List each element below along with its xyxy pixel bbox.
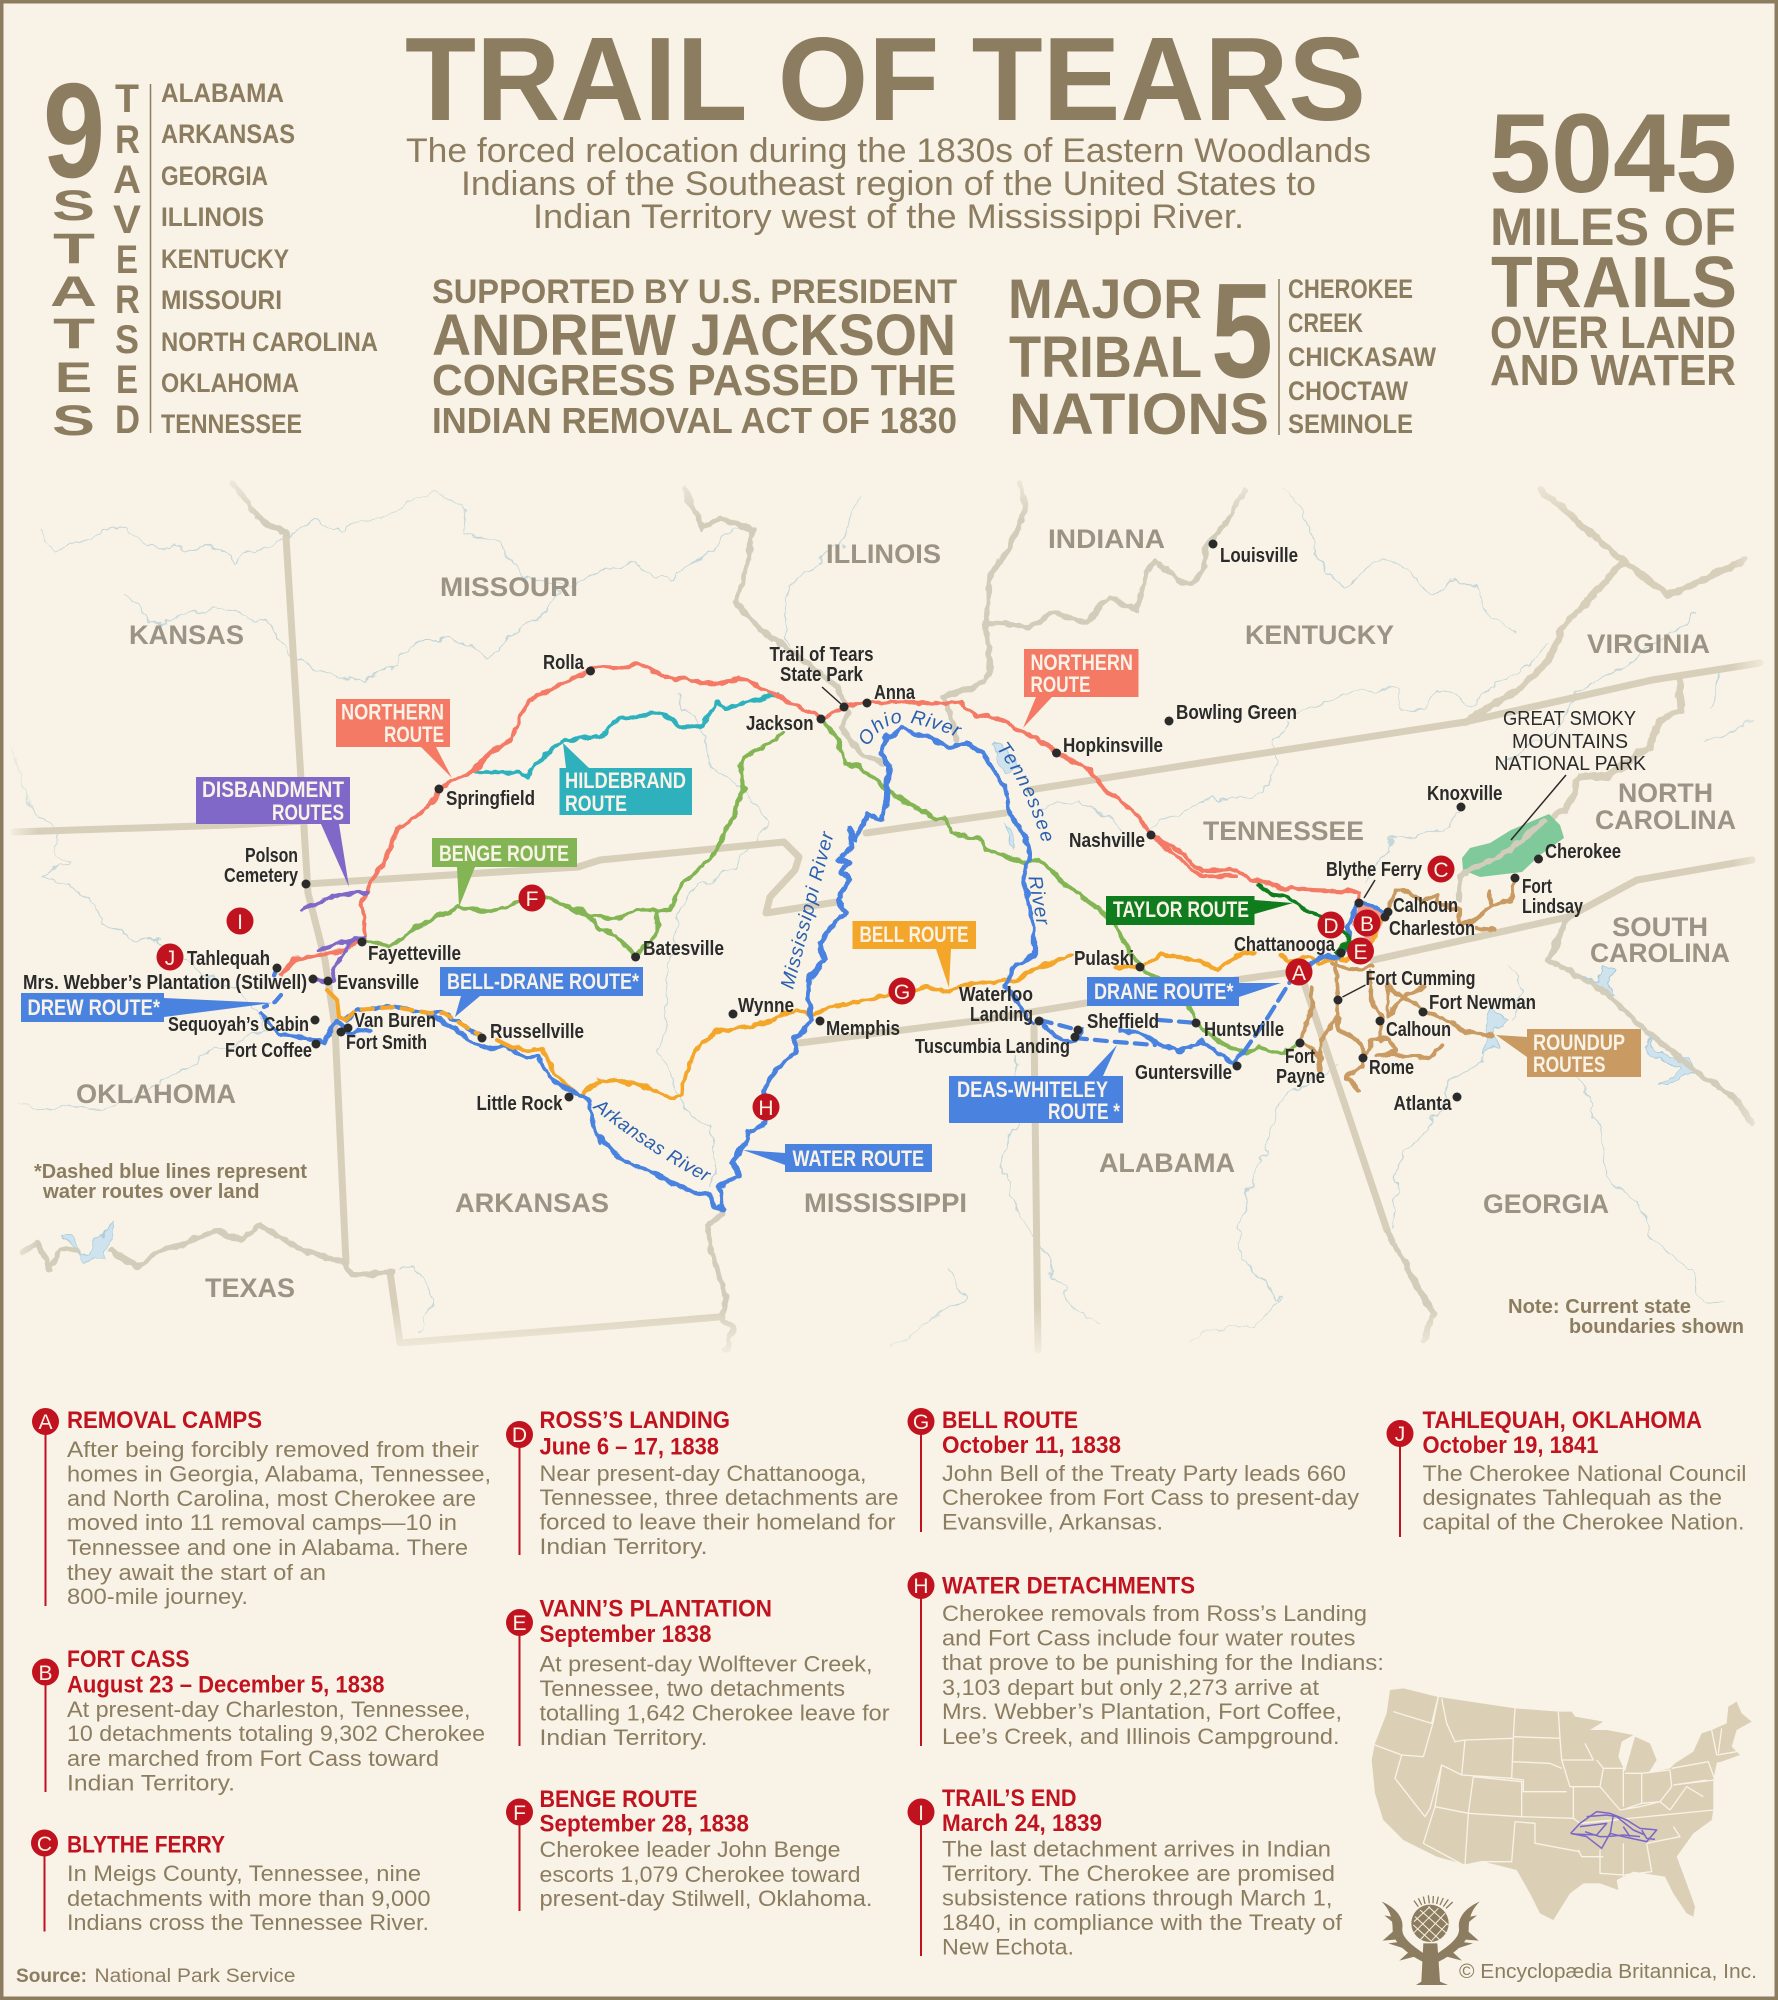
subtitle text block [406,132,1371,236]
panel: timeline entry E: VANN’S PLANTATION [540,1596,772,1622]
map marker J: J [165,947,175,970]
panel: timeline entry D: Near present-day Chattanooga, [540,1461,866,1486]
wavy state boundaries [23,483,1752,1350]
panel: Andrew Jackson statement: INDIAN REMOVAL ACT OF 1830 [432,400,957,441]
map marker H [752,1094,780,1120]
city labels: State Park [780,664,864,686]
map marker G: G [894,981,910,1004]
state labels: SOUTH [1612,912,1708,942]
panel: timeline entry B: Indian Territory. [67,1770,235,1796]
note: dashed blue lines [34,1161,307,1203]
callout: Drew route [21,993,272,1022]
callout: Roundup routes: ROUTES [1533,1052,1606,1077]
panel: timeline entry D: Indian Territory. [540,1534,708,1559]
panel: timeline entry E: Indian Territory. [540,1725,708,1750]
list of states: ARKANSAS [161,119,295,149]
list of nations: CHICKASAW [1288,342,1436,372]
callout: Hildebrand route: HILDEBRAND [565,768,686,793]
panel: 5045 miles of trails: 5045 [1489,91,1737,216]
panel: Andrew Jackson statement: SUPPORTED BY U.S. PRESIDENT [432,273,957,311]
panel: Andrew Jackson statement [432,273,957,441]
city labels: Calhoun [1393,895,1458,917]
panel: timeline entry F: BENGE ROUTE [540,1786,698,1813]
city labels: Sheffield [1087,1011,1159,1033]
Fort Cass shaded area [1352,903,1388,945]
route: Taylor [1258,885,1350,953]
vertical word TRAVERSED: E [116,238,138,282]
river labels: Tennessee [998,742,1052,841]
map marker A [1286,958,1312,986]
city labels: Fort Newman [1429,992,1536,1014]
panel: timeline entry I: New Echota. [942,1934,1074,1960]
vertical word TRAVERSED: T [115,77,139,121]
river labels: Ohio River [860,710,962,744]
icon: Britannica thistle [1382,1895,1480,1985]
small trail routes on locator map [1571,1812,1657,1848]
state labels: GEORGIA [1483,1189,1609,1219]
map marker H: H [758,1097,774,1120]
list of states: MISSOURI [161,285,282,315]
panel: timeline entry A: After being forcibly removed from their [67,1437,479,1462]
panel: timeline entry G: BELL ROUTE [942,1407,1078,1434]
state labels: TEXAS [205,1273,295,1303]
rivers and lakes [11,487,1752,1350]
city labels: Pulaski [1074,948,1134,970]
panel: timeline entry H: Cherokee removals from Ross’s Landing [942,1601,1367,1626]
panel: timeline entry E: E [512,1612,527,1635]
panel: timeline entry H: 3,103 depart but only 2,273 arrive at [942,1675,1319,1700]
panel: timeline entry B: are marched from Fort Cass toward [67,1746,439,1771]
list of states: NORTH CAROLINA [161,327,378,357]
state labels: MISSOURI [440,572,578,602]
city labels: Batesville [643,938,724,960]
callout: Deas-Whiteley route: DEAS-WHITELEY [957,1077,1108,1102]
panel: timeline entry G: October 11, 1838 [942,1432,1121,1459]
callout: Northern route east: ROUTE [1030,672,1090,697]
vertical word STATES: S [52,182,95,230]
city labels [23,545,1621,1115]
panel: timeline entry C: Indians cross the Tennessee River. [67,1910,429,1935]
city labels: Russellville [490,1021,584,1043]
panel: Andrew Jackson statement: CONGRESS PASSED THE [432,356,956,405]
city labels: Rome [1369,1057,1414,1079]
panel: timeline entry E: September 1838 [540,1621,712,1648]
city labels: Memphis [826,1018,900,1040]
map marker C [1428,856,1454,882]
panel: timeline entry J [1386,1407,1746,1537]
panel: timeline entry H: and Fort Cass include four water routes [942,1626,1356,1650]
panel: timeline entry C: C [37,1833,52,1856]
city labels: Louisville [1220,545,1298,567]
note: current state boundaries: boundaries shown [1569,1316,1744,1338]
panel: timeline entry D: D [512,1424,527,1447]
state labels: INDIANA [1048,524,1165,554]
panel: 5 major tribal nations [1008,255,1436,447]
list of nations: CREEK [1288,308,1363,338]
callout: Northern route west: ROUTE [384,722,444,747]
vertical word TRAVERSED: R [115,278,140,322]
list of nations: CHOCTAW [1288,376,1408,406]
panel: timeline entry C: In Meigs County, Tennessee, nine [67,1861,421,1886]
panel: timeline entry F: F [513,1802,526,1825]
map marker B [1354,910,1380,936]
map marker G [888,978,916,1004]
state labels: NORTH [1618,778,1713,808]
river labels: River [1023,874,1054,928]
panel: timeline entry F: present-day Stilwell, Oklahoma. [540,1886,872,1911]
vertical word STATES: A [50,268,97,316]
Great Smoky Mountains National Park area [1462,814,1564,877]
city labels: Springfield [446,788,535,810]
note: dashed blue lines: water routes over land [42,1181,260,1203]
city labels: Tuscumbia Landing [915,1036,1070,1058]
callout: Bell-Drane route: BELL-DRANE ROUTE* [447,969,639,994]
panel: timeline entry J: October 19, 1841 [1422,1432,1598,1459]
panel: 9 states traversed [43,55,378,445]
note: dashed blue lines: *Dashed blue lines represent [34,1161,307,1183]
map marker B: B [1360,913,1374,936]
panel: timeline entry B: B [38,1662,53,1685]
list of nations: CHEROKEE [1288,274,1413,304]
state labels: ILLINOIS [826,539,941,569]
panel: timeline entry I: March 24, 1839 [942,1810,1102,1837]
panel: timeline entry G: Cherokee from Fort Cass to present-day [942,1485,1359,1510]
city labels: Guntersville [1135,1062,1232,1084]
vertical word STATES: T [53,310,95,358]
panel: timeline entry J: capital of the Cherokee Nation. [1422,1510,1744,1534]
city labels: Charleston [1389,918,1475,940]
callout: Drane route: DRANE ROUTE* [1094,979,1234,1004]
panel: timeline entry F: escorts 1,079 Cherokee toward [540,1862,860,1887]
list of states: KENTUCKY [161,244,289,274]
callout: Roundup routes: ROUNDUP [1533,1030,1625,1055]
panel: timeline entry E: totalling 1,642 Cherokee leave for [540,1700,890,1726]
panel: route map [10,480,1764,1353]
callout: Disbandment routes [196,777,350,887]
river labels: Arkansas River [592,1102,712,1180]
river labels [592,710,1054,1180]
panel: timeline entry G: Evansville, Arkansas. [942,1510,1163,1534]
leader lines [822,687,1566,997]
subtitle text block: Indians of the Southeast region of the United States to [461,165,1316,203]
panel: timeline entry A: they await the start of an [67,1560,326,1585]
callout: Northern route east: NORTHERN [1030,650,1133,675]
panel: timeline entry A: homes in Georgia, Alabama, Tennessee, [67,1462,491,1486]
city labels: Bowling Green [1176,702,1297,724]
map marker F: F [526,888,538,911]
callout: Roundup routes [1496,1029,1641,1077]
heading: major tribal nations: NATIONS [1009,382,1269,447]
state labels: ALABAMA [1099,1148,1235,1178]
vertical word STATES: E [55,354,92,402]
map marker J [156,944,184,970]
map edge fades [4,465,1774,1365]
city labels: Knoxville [1427,783,1502,805]
callout: Hildebrand route: ROUTE [565,791,627,816]
vertical word STATES: T [53,225,95,273]
callout: Disbandment routes: ROUTES [272,800,344,825]
panel: timeline entry H: WATER DETACHMENTS [942,1572,1195,1600]
map marker E [1347,938,1374,964]
city labels: Chattanooga [1234,934,1336,956]
city labels: Wynne [738,995,794,1017]
callout: Bell-Drane route [440,967,643,1017]
panel: timeline entry D: ROSS’S LANDING [540,1407,730,1434]
vertical word TRAVERSED: D [115,398,140,442]
panel: timeline entry A: moved into 11 removal camps—10 in [67,1510,457,1535]
boundary across park [1459,820,1545,900]
city labels: Huntsville [1204,1019,1284,1041]
city labels: Calhoun [1386,1019,1451,1041]
city labels: Hopkinsville [1063,735,1163,757]
list of states: ILLINOIS [161,202,264,232]
panel: 5045 miles of trails: OVER LAND [1490,307,1736,358]
city labels: Jackson [746,713,814,735]
city labels: Blythe Ferry [1326,859,1423,881]
heading: major tribal nations: TRIBAL [1009,325,1202,390]
panel: timeline entry F: September 28, 1838 [540,1810,749,1838]
panel: timeline entry D: forced to leave their homeland for [540,1510,896,1534]
label: Great Smoky Mountains National Park: NATIONAL PARK [1494,752,1646,775]
city labels: Little Rock [476,1093,563,1115]
callout: Northern route west [336,699,452,778]
panel: 5045 miles of trails: MILES OF [1490,198,1736,257]
map marker E: E [1353,941,1368,964]
panel: timeline entry B: 10 detachments totaling 9,302 Cherokee [67,1721,485,1746]
callout: Disbandment routes: DISBANDMENT [202,777,344,802]
panel: timeline entry F: Cherokee leader John Benge [540,1837,840,1862]
city dots [272,540,1543,1102]
source credit [16,1966,296,1987]
label: Great Smoky Mountains National Park [1494,707,1646,775]
panel: timeline entry I: The last detachment arrives in Indian [942,1836,1331,1862]
panel: 5045 miles of trails: AND WATER [1490,346,1736,395]
panel: timeline entry H [908,1572,1384,1749]
callout: Water route: WATER ROUTE [792,1146,924,1171]
city labels: Tahlequah [187,948,270,970]
state labels: CAROLINA [1590,938,1730,968]
panel: timeline entry G: G [913,1411,929,1434]
title: TRAIL OF TEARS [405,13,1366,146]
city labels: Cemetery [224,865,299,887]
city labels: Lindsay [1522,896,1584,918]
label: Great Smoky Mountains National Park: GREAT SMOKY [1503,707,1636,730]
panel: timeline entry E: At present-day Wolftever Creek, [540,1652,872,1676]
city labels: Rolla [543,652,585,674]
map marker F [518,884,546,912]
list of states: GEORGIA [161,161,268,191]
state labels: TENNESSEE [1203,816,1364,846]
panel: timeline entry J: TAHLEQUAH, OKLAHOMA [1422,1407,1702,1434]
city labels: Trail of Tears [770,644,874,666]
Britannica copyright: © Encyclopædia Britannica, Inc. [1459,1961,1757,1983]
panel: timeline entry B: FORT CASS [67,1646,190,1673]
callout: Drew route: DREW ROUTE* [28,995,160,1020]
callout: Benge route [432,838,577,907]
heading: major tribal nations [1008,267,1269,447]
route: Hildebrand [475,696,778,777]
panel: timeline entry A: REMOVAL CAMPS [67,1407,262,1434]
panel: timeline entry C: BLYTHE FERRY [67,1832,225,1858]
callout: Deas-Whiteley route: ROUTE * [1048,1099,1120,1124]
panel: timeline entry A [32,1407,491,1609]
map marker D [1318,912,1344,938]
panel: timeline entry G: John Bell of the Treaty Party leads 660 [942,1461,1346,1486]
route: Roundup [1300,880,1515,1090]
city labels: Fort [1285,1046,1315,1068]
panel: timeline entry I: Territory. The Cherokee are promised [942,1861,1335,1886]
vertical word TRAVERSED: R [115,118,140,162]
callout: Benge route: BENGE ROUTE [439,841,569,866]
callout: Deas-Whiteley route [949,1045,1123,1124]
state labels: OKLAHOMA [76,1079,236,1109]
state labels: VIRGINIA [1587,629,1710,659]
panel: Andrew Jackson statement: ANDREW JACKSON [432,303,956,368]
panel: timeline entry H: H [913,1575,929,1598]
callout: Bell route [852,921,976,988]
map marker I [226,908,254,934]
map marker C: C [1433,859,1449,882]
panel: timeline entry I: TRAIL’S END [942,1785,1076,1812]
vertical word TRAVERSED: E [116,358,138,402]
list of nations [1288,274,1436,439]
state labels: ARKANSAS [455,1188,609,1218]
vertical word TRAVERSED: S [115,318,139,362]
state labels: CAROLINA [1595,805,1736,835]
panel: timeline entry D [506,1407,898,1559]
city labels: Polson [245,845,298,867]
city labels: Nashville [1069,830,1145,852]
vertical word TRAVERSED: V [113,198,141,242]
city labels: Fort [1522,876,1552,898]
route: Bell-Drane dashed overlay [327,990,513,1048]
map marker A: A [1292,962,1306,985]
vertical word STATES: S [52,397,95,445]
city labels: Evansville [337,972,419,994]
river labels: Mississippi River [780,830,833,990]
subtitle text block: Indian Territory west of the Mississippi River. [533,198,1244,236]
subtitle text block: The forced relocation during the 1830s of Eastern Woodlands [406,132,1371,170]
panel: timeline entry H: Lee’s Creek, and Illinois Campground. [942,1724,1340,1749]
city labels: Anna [874,682,916,704]
city labels: Payne [1276,1066,1325,1088]
dashed blue water-over-land routes [264,968,1293,1053]
panel: timeline entry J: J [1395,1423,1405,1446]
label: Great Smoky Mountains National Park: MOUNTAINS [1512,730,1628,753]
panel: timeline entry I: 1840, in compliance with the Treaty of [942,1910,1343,1935]
big number 9: 9 [43,55,105,206]
panel: timeline entry A: A [38,1411,53,1434]
heading: major tribal nations: MAJOR [1008,267,1202,330]
panel: 5045 miles of trails: TRAILS [1491,243,1737,323]
big number 5: 5 [1211,255,1273,406]
callout: Northern route east [1023,649,1138,728]
panel: timeline entry E: Tennessee, two detachments [540,1676,845,1701]
panel: timeline entry F [506,1786,872,1911]
note: current state boundaries: Note: Current state [1508,1296,1691,1318]
panel: timeline entry J: designates Tahlequah as the [1422,1485,1722,1510]
source credit: Source: [16,1966,87,1987]
panel: timeline entry D: Tennessee, three detachments are [540,1485,898,1510]
map marker I: I [237,911,243,934]
list of states: TENNESSEE [161,409,302,439]
city labels: Waterloo [959,984,1033,1006]
list of states [161,78,378,439]
panel: timeline entry I [908,1785,1343,1960]
panel: timeline entry C [31,1830,430,1935]
panel: 5045 miles of trails [1489,91,1737,395]
panel: timeline entry H: Mrs. Webber’s Plantation, Fort Coffee, [942,1699,1342,1724]
panel: timeline entry A: Tennessee and one in Alabama. There [67,1535,468,1560]
route: Bell [513,920,1381,1098]
panel: timeline entry A: 800-mile journey. [67,1584,248,1609]
panel: timeline entry A: and North Carolina, most Cherokee are [67,1486,476,1511]
city labels: Landing [970,1004,1033,1026]
callout: Northern route west: NORTHERN [341,700,444,724]
source credit: National Park Service [94,1966,296,1987]
city labels: Fort Coffee [225,1040,312,1062]
state labels [76,524,1736,1303]
straight state boundaries [14,537,1760,1350]
list of states: ALABAMA [161,78,284,108]
vertical word TRAVERSED [113,77,141,442]
city labels: Sequoyah’s Cabin [168,1014,309,1036]
panel: timeline entry I: I [918,1802,924,1825]
state labels: KANSAS [129,620,244,650]
panel: timeline entry C: detachments with more than 9,000 [67,1886,430,1911]
city labels: Fort Smith [346,1032,427,1054]
routes: Disbandment [302,892,367,982]
list of states: OKLAHOMA [161,368,299,398]
locator map of the United States [1372,1688,1752,1920]
vertical word TRAVERSED: A [113,158,141,202]
list of nations: SEMINOLE [1288,409,1413,439]
city labels: Mrs. Webber’s Plantation (Stilwell) [23,972,307,994]
route: Benge [367,719,1297,1053]
route: water route and Drew, Drane, Deas-Whiteley routes [260,728,1388,1210]
city labels: Fayetteville [368,943,461,965]
panel: timeline entry J: The Cherokee National Council [1422,1461,1746,1486]
state labels: KENTUCKY [1245,620,1394,650]
panel: timeline entry E [506,1596,890,1750]
city labels: Fort Cumming [1366,968,1476,990]
city labels: Cherokee [1545,841,1621,863]
callout: Hildebrand route [560,743,692,816]
map marker D: D [1323,915,1339,938]
panel: timeline entry B [32,1646,485,1796]
state labels: MISSISSIPPI [804,1188,967,1218]
route: Northern [281,663,1358,975]
panel: timeline entry D: June 6 – 17, 1838 [540,1434,719,1460]
panel: timeline entry H: that prove to be punishing for the Indians: [942,1650,1384,1675]
vertical word STATES [50,182,97,445]
panel: timeline entry G [908,1407,1359,1534]
callout: Taylor route: TAYLOR ROUTE [1113,897,1249,922]
city labels: Atlanta [1394,1093,1452,1115]
panel: timeline entry B: August 23 – December 5, 1838 [67,1672,384,1698]
panel: timeline entry I: subsistence rations through March 1, [942,1886,1332,1910]
callout: Water route [743,1144,932,1172]
city labels: Van Buren [354,1010,436,1032]
note: current state boundaries [1508,1296,1744,1338]
panel: timeline entry B: At present-day Charleston, Tennessee, [67,1697,470,1722]
callout: Bell route: BELL ROUTE [860,922,968,947]
